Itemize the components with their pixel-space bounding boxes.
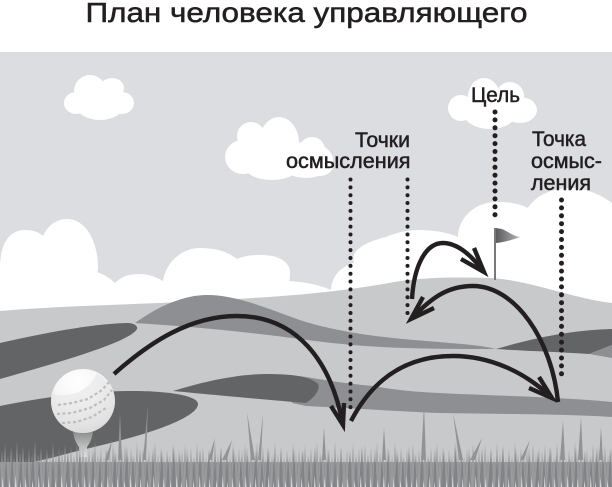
- arrow 1: [114, 316, 344, 425]
- label: meaning point: ления: [531, 172, 591, 195]
- golf ball on tee: [51, 369, 115, 457]
- label: meaning point: Точка: [532, 128, 586, 151]
- arrow 3: [411, 286, 558, 402]
- bunker: dark lower left: [0, 391, 198, 470]
- bunker: dark centre: [173, 374, 319, 403]
- hill: dark right: [496, 329, 612, 354]
- arrow 2: [351, 356, 552, 421]
- clouds on horizon: [0, 188, 612, 320]
- dotted line: meaning point right: [559, 200, 564, 381]
- label: meaning points: осмысления: [286, 150, 410, 173]
- dotted line: meaning point left: [348, 180, 352, 412]
- label: meaning points: Точки: [355, 129, 410, 152]
- ball: [51, 369, 115, 433]
- dotted line: meaning point middle: [406, 180, 410, 320]
- hill: mid-grey right corner: [589, 345, 612, 358]
- bunker: dark upper left: [0, 323, 137, 379]
- cloud: middle: [225, 117, 333, 180]
- label: meaning point: осмыс-: [531, 150, 602, 173]
- tee: [73, 431, 93, 457]
- cloud: upper left: [64, 75, 134, 120]
- arrow 4: [412, 243, 484, 299]
- green: main ground: [0, 277, 612, 487]
- flag: [494, 228, 520, 280]
- label: meaning point: [531, 128, 602, 195]
- label: meaning points: [286, 129, 410, 173]
- label: goal: Цель: [471, 84, 520, 107]
- dotted line: goal: [492, 112, 498, 219]
- cloud: behind label goal: [448, 78, 537, 129]
- grass: [0, 405, 612, 487]
- hill: mid-grey back ridge: [135, 295, 496, 349]
- band: mid-grey lower right: [290, 375, 612, 417]
